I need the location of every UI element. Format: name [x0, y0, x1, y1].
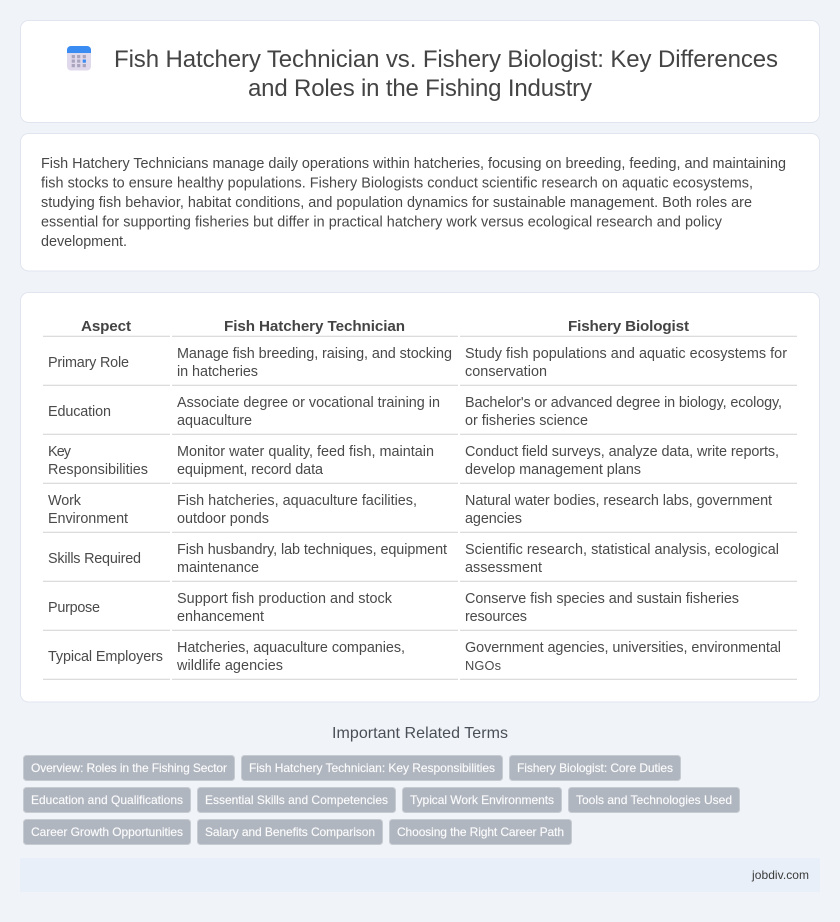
chip: Typical Work Environments: [410, 793, 554, 807]
chip: Fish Hatchery Technician: Key Responsibilities: [249, 761, 495, 775]
row: purpose: [48, 591, 739, 625]
row: key responsibilities: Key: [48, 444, 72, 460]
panel: comparison table: [20, 292, 820, 702]
row: work environment: Work: [48, 493, 82, 509]
row: purpose: Conserve fish species and sustain fisheries: [465, 591, 739, 607]
table header row: Fishery Biologist: [568, 318, 689, 335]
chip: [24, 756, 234, 780]
icon: calendar: [67, 46, 91, 70]
row: education: Education: [48, 404, 111, 420]
chip: [568, 788, 740, 812]
chip: Tools and Technologies Used: [576, 793, 732, 807]
row: education: Associate degree or vocational training in: [177, 395, 440, 411]
panel: title header: [20, 20, 820, 122]
text block: summary paragraph: studying fish behavior, habitat conditions, and population dynamics for sustainable management. Both roles are: [41, 195, 752, 211]
row: primary role: conservation: [465, 364, 547, 380]
row: primary role: Primary Role: [48, 355, 129, 371]
table header row: Fish Hatchery Technician: [224, 318, 405, 335]
row: purpose: resources: [465, 609, 527, 625]
title: [114, 46, 778, 102]
chip: [510, 756, 680, 780]
row: skills required: Scientific research, statistical analysis, ecological: [465, 542, 779, 558]
row: typical employers: Hatcheries, aquaculture companies,: [177, 640, 405, 656]
row: work environment: agencies: [465, 511, 522, 527]
title: and Roles in the Fishing Industry: [248, 75, 592, 102]
row: key responsibilities: equipment, record data: [177, 462, 323, 478]
row: typical employers: Typical Employers: [48, 649, 163, 665]
chip: Fishery Biologist: Core Duties: [517, 761, 673, 775]
row: work environment: Fish hatcheries, aquaculture facilities,: [177, 493, 417, 509]
chip: Career Growth Opportunities: [31, 825, 183, 839]
row: key responsibilities: Monitor water quality, feed fish, maintain: [177, 444, 434, 460]
chip: [390, 820, 572, 844]
row: education: Bachelor's or advanced degree in biology, ecology,: [465, 395, 782, 411]
row: skills required: assessment: [465, 560, 542, 576]
chip: Education and Qualifications: [31, 793, 183, 807]
text block: summary paragraph: development.: [41, 234, 127, 250]
chip: [24, 820, 190, 844]
panel: introduction: [20, 134, 820, 271]
row: work environment: Natural water bodies, research labs, government: [465, 493, 772, 509]
row: key responsibilities: [48, 444, 779, 478]
row: typical employers: [48, 640, 781, 674]
row: work environment: Environment: [48, 511, 128, 527]
chip: [242, 756, 502, 780]
chip: [198, 788, 396, 812]
row: key responsibilities: develop management plans: [465, 462, 641, 478]
row: key responsibilities: Responsibilities: [48, 462, 148, 478]
footer bar: [20, 858, 820, 892]
row: typical employers: wildlife agencies: [176, 658, 283, 674]
chip: Salary and Benefits Comparison: [205, 825, 375, 839]
row: typical employers: Government agencies, universities, environmental: [465, 640, 781, 656]
row: primary role: Study fish populations and aquatic ecosystems for: [465, 346, 787, 362]
text block: summary paragraph: Fish Hatchery Technicians manage daily operations within hatcheries, focusing on breeding, feeding, and maintaining: [41, 156, 786, 172]
row: purpose: Support fish production and stock: [177, 591, 393, 607]
row: skills required: maintenance: [177, 560, 259, 576]
row: skills required: Skills Required: [48, 551, 141, 567]
text block: summary paragraph: [41, 156, 786, 250]
row: skills required: [48, 542, 779, 576]
row: typical employers: NGOs: [465, 658, 501, 673]
row: key responsibilities: Conduct field surveys, analyze data, write reports,: [465, 444, 779, 460]
row: education: aquaculture: [177, 413, 252, 429]
row: education: or fisheries science: [465, 413, 588, 429]
row: purpose: enhancement: [177, 609, 264, 625]
row: primary role: in hatcheries: [177, 364, 258, 380]
related term chips: [24, 756, 740, 844]
text block: summary paragraph: essential for supporting fisheries but differ in practical hatchery work versus ecological research and policy: [41, 214, 723, 230]
table header row: Aspect: [81, 318, 131, 335]
row: primary role: [48, 346, 787, 380]
heading: important related terms: Important Related Terms: [332, 725, 508, 742]
text block: summary paragraph: fish stocks to ensure healthy populations. Fishery Biologists conduct scientific research on aquatic ecosystems,: [41, 176, 753, 192]
row: primary role: Manage fish breeding, raising, and stocking: [177, 346, 452, 362]
chip: Overview: Roles in the Fishing Sector: [31, 761, 227, 775]
row: purpose: Purpose: [48, 600, 100, 616]
chip: Choosing the Right Career Path: [397, 825, 564, 839]
row: education: [48, 395, 782, 429]
table header row: [81, 318, 689, 335]
row: skills required: Fish husbandry, lab techniques, equipment: [177, 542, 447, 558]
title: Fish Hatchery Technician vs. Fishery Biologist: Key Differences: [114, 46, 778, 73]
chip: [402, 788, 562, 812]
chip: Essential Skills and Competencies: [205, 793, 388, 807]
row: work environment: outdoor ponds: [177, 511, 269, 527]
footer source text: jobdiv.com: [751, 868, 809, 882]
row: work environment: [48, 493, 772, 527]
chip: [198, 820, 382, 844]
chip: [24, 788, 190, 812]
